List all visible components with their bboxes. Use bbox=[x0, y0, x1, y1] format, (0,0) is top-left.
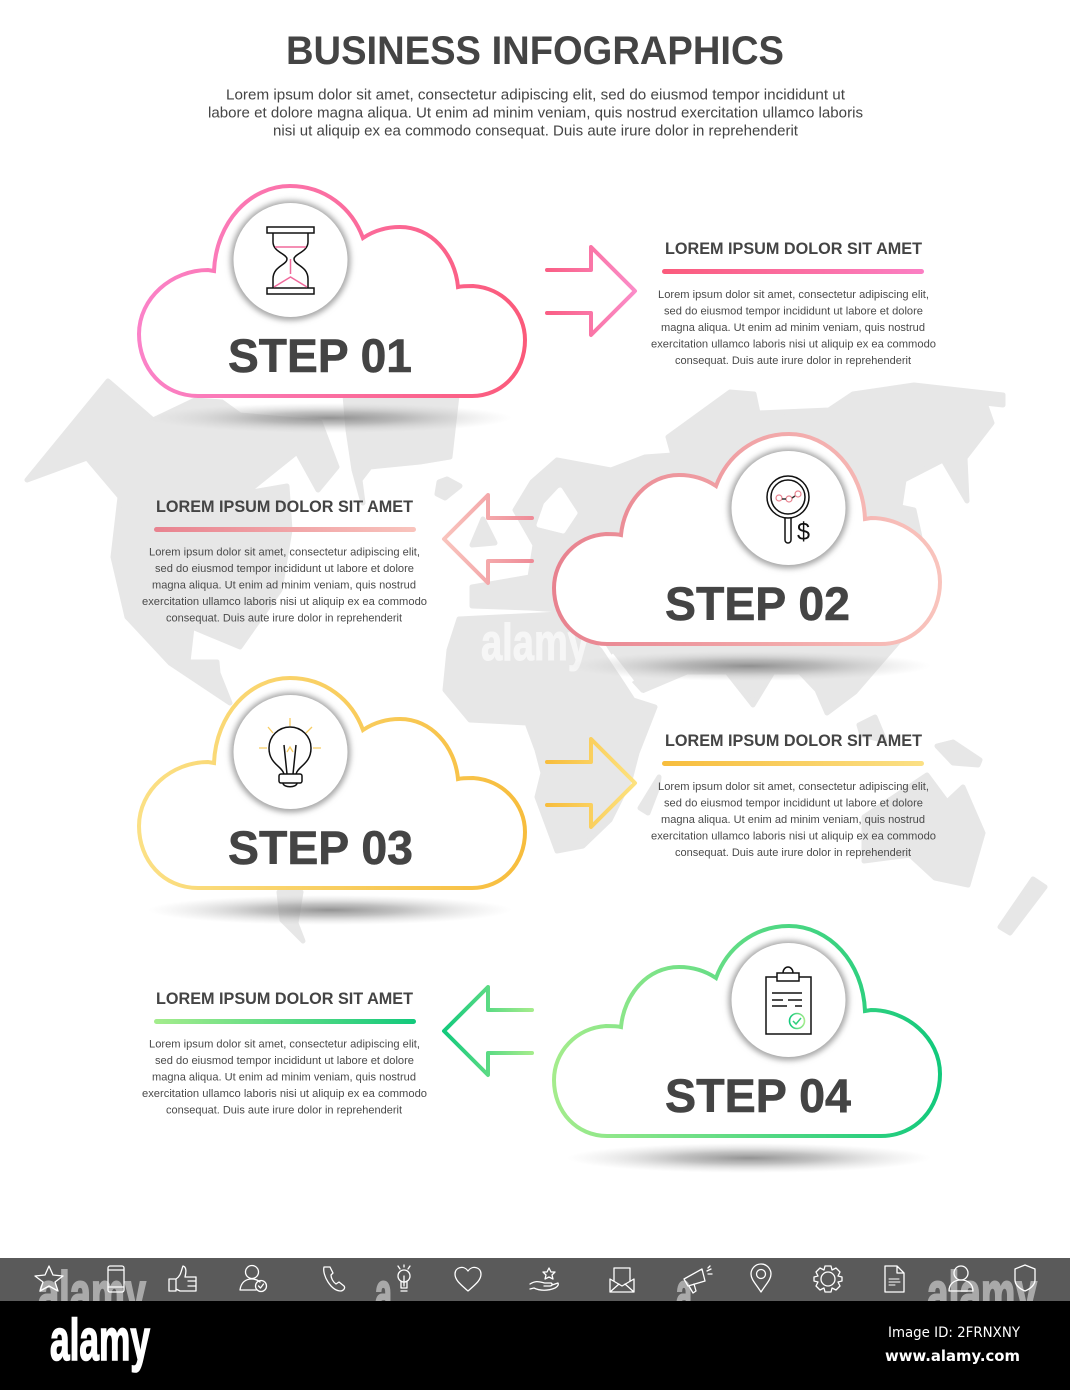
heading: LOREM IPSUM DOLOR SIT AMET bbox=[665, 731, 923, 750]
watermark on map: alamy bbox=[481, 614, 589, 672]
footer band bbox=[0, 1301, 1070, 1390]
body text: exercitation ullamco laboris nisi ut aliquip ex ea commodo bbox=[651, 830, 936, 842]
icon circle bbox=[728, 940, 848, 1060]
body text: Lorem ipsum dolor sit amet, consectetur adipiscing elit, bbox=[149, 546, 420, 558]
heading: LOREM IPSUM DOLOR SIT AMET bbox=[156, 989, 414, 1008]
description bbox=[142, 497, 427, 624]
body text: consequat. Duis aute irure dolor in reprehenderit bbox=[166, 612, 402, 624]
panel: step 02 bbox=[142, 434, 940, 681]
icon: star bbox=[35, 1266, 63, 1291]
body text: Lorem ipsum dolor sit amet, consectetur adipiscing elit, bbox=[149, 1038, 420, 1050]
step label: STEP 04 bbox=[665, 1069, 851, 1122]
icon: hand with star bbox=[530, 1268, 558, 1290]
body text bbox=[142, 546, 427, 624]
cloud outline bbox=[139, 186, 525, 396]
description bbox=[651, 731, 936, 859]
heading rule bbox=[154, 527, 416, 532]
icon circle bbox=[728, 448, 848, 568]
cloud outline bbox=[554, 926, 940, 1136]
panel: step 01 bbox=[139, 186, 936, 433]
cloud outline bbox=[554, 434, 940, 644]
intro text: labore et dolore magna aliqua. Ut enim ad minim veniam, quis nostrud exercitation ullamco laboris bbox=[208, 106, 863, 122]
icon: megaphone bbox=[684, 1266, 712, 1293]
icon: user check bbox=[240, 1266, 266, 1292]
icon: magnifier with dollar bbox=[767, 476, 810, 546]
body text: exercitation ullamco laboris nisi ut aliquip ex ea commodo bbox=[142, 1088, 427, 1100]
icon: envelope bbox=[610, 1268, 634, 1292]
heading rule bbox=[154, 1019, 416, 1024]
heading rule bbox=[662, 269, 924, 274]
website: www.alamy.com bbox=[885, 1347, 1020, 1365]
intro text: Lorem ipsum dolor sit amet, consectetur adipiscing elit, sed do eiusmod tempor incididunt ut bbox=[226, 88, 845, 104]
icon: light bulb bbox=[259, 718, 321, 787]
icon: heart bbox=[455, 1267, 481, 1291]
body text: magna aliqua. Ut enim ad minim veniam, quis nostrud bbox=[661, 814, 925, 826]
body text bbox=[142, 1038, 427, 1116]
arrow bbox=[444, 987, 532, 1075]
icon circle bbox=[230, 692, 350, 812]
description bbox=[142, 989, 427, 1116]
body text: magna aliqua. Ut enim ad minim veniam, quis nostrud bbox=[152, 580, 416, 592]
heading: LOREM IPSUM DOLOR SIT AMET bbox=[665, 239, 923, 258]
icon: hourglass bbox=[267, 227, 314, 294]
body text: consequat. Duis aute irure dolor in reprehenderit bbox=[166, 1104, 402, 1116]
icon: phone bbox=[108, 1266, 124, 1292]
body text: exercitation ullamco laboris nisi ut aliquip ex ea commodo bbox=[142, 596, 427, 608]
icon: telephone bbox=[324, 1267, 345, 1291]
panel: step 04 bbox=[142, 926, 940, 1173]
ground shadow bbox=[148, 403, 512, 433]
icon circle bbox=[230, 200, 350, 320]
icon: document bbox=[885, 1266, 904, 1292]
body text: consequat. Duis aute irure dolor in reprehenderit bbox=[675, 847, 911, 859]
icon: person bbox=[949, 1266, 973, 1291]
ground shadow bbox=[567, 651, 931, 681]
icon: clipboard bbox=[766, 967, 811, 1034]
icon bar bbox=[0, 1258, 1070, 1301]
icon bar: a bbox=[676, 1260, 692, 1327]
body text: sed do eiusmod tempor incididunt ut labore et dolore bbox=[664, 798, 923, 810]
intro text: nisi ut aliquip ex ea commodo consequat. Duis aute irure dolor in reprehenderit bbox=[273, 124, 798, 140]
icon: gear bbox=[814, 1266, 842, 1292]
heading rule bbox=[662, 761, 924, 766]
body text: magna aliqua. Ut enim ad minim veniam, quis nostrud bbox=[152, 1072, 416, 1084]
cloud outline bbox=[139, 678, 525, 888]
ground shadow bbox=[567, 1143, 931, 1173]
body text: exercitation ullamco laboris nisi ut aliquip ex ea commodo bbox=[651, 338, 936, 350]
title: BUSINESS INFOGRAPHICS bbox=[286, 29, 784, 73]
ground shadow bbox=[148, 895, 512, 925]
intro text bbox=[208, 88, 863, 140]
icon: thumbs up bbox=[169, 1266, 196, 1291]
body text bbox=[651, 781, 936, 859]
body text: sed do eiusmod tempor incididunt ut labore et dolore bbox=[664, 306, 923, 318]
arrow bbox=[547, 739, 635, 827]
panel: step 03 bbox=[139, 678, 936, 925]
arrow bbox=[444, 495, 532, 583]
body text: sed do eiusmod tempor incididunt ut labore et dolore bbox=[155, 563, 414, 575]
alamy logo: alamy bbox=[50, 1308, 150, 1373]
image id: Image ID: 2FRNXNY bbox=[888, 1325, 1020, 1341]
step label: STEP 03 bbox=[228, 821, 413, 874]
heading: LOREM IPSUM DOLOR SIT AMET bbox=[156, 497, 414, 516]
body text: magna aliqua. Ut enim ad minim veniam, quis nostrud bbox=[661, 322, 925, 334]
description bbox=[651, 239, 936, 367]
body text: sed do eiusmod tempor incididunt ut labore et dolore bbox=[155, 1055, 414, 1067]
world map bbox=[27, 381, 1045, 941]
step label: STEP 01 bbox=[228, 329, 412, 382]
icon bar: alamy bbox=[38, 1260, 146, 1327]
icon: shield bbox=[1015, 1265, 1035, 1291]
icon: map pin bbox=[751, 1264, 771, 1292]
body text bbox=[651, 289, 936, 367]
icon: bulb bbox=[398, 1265, 410, 1291]
body text: Lorem ipsum dolor sit amet, consectetur adipiscing elit, bbox=[658, 781, 929, 793]
step label: STEP 02 bbox=[665, 577, 850, 630]
body text: consequat. Duis aute irure dolor in reprehenderit bbox=[675, 355, 911, 367]
icon: magnifier with dollar: $ bbox=[797, 518, 810, 546]
body text: Lorem ipsum dolor sit amet, consectetur adipiscing elit, bbox=[658, 289, 929, 301]
icon bar: a bbox=[375, 1260, 392, 1327]
arrow bbox=[547, 247, 635, 335]
